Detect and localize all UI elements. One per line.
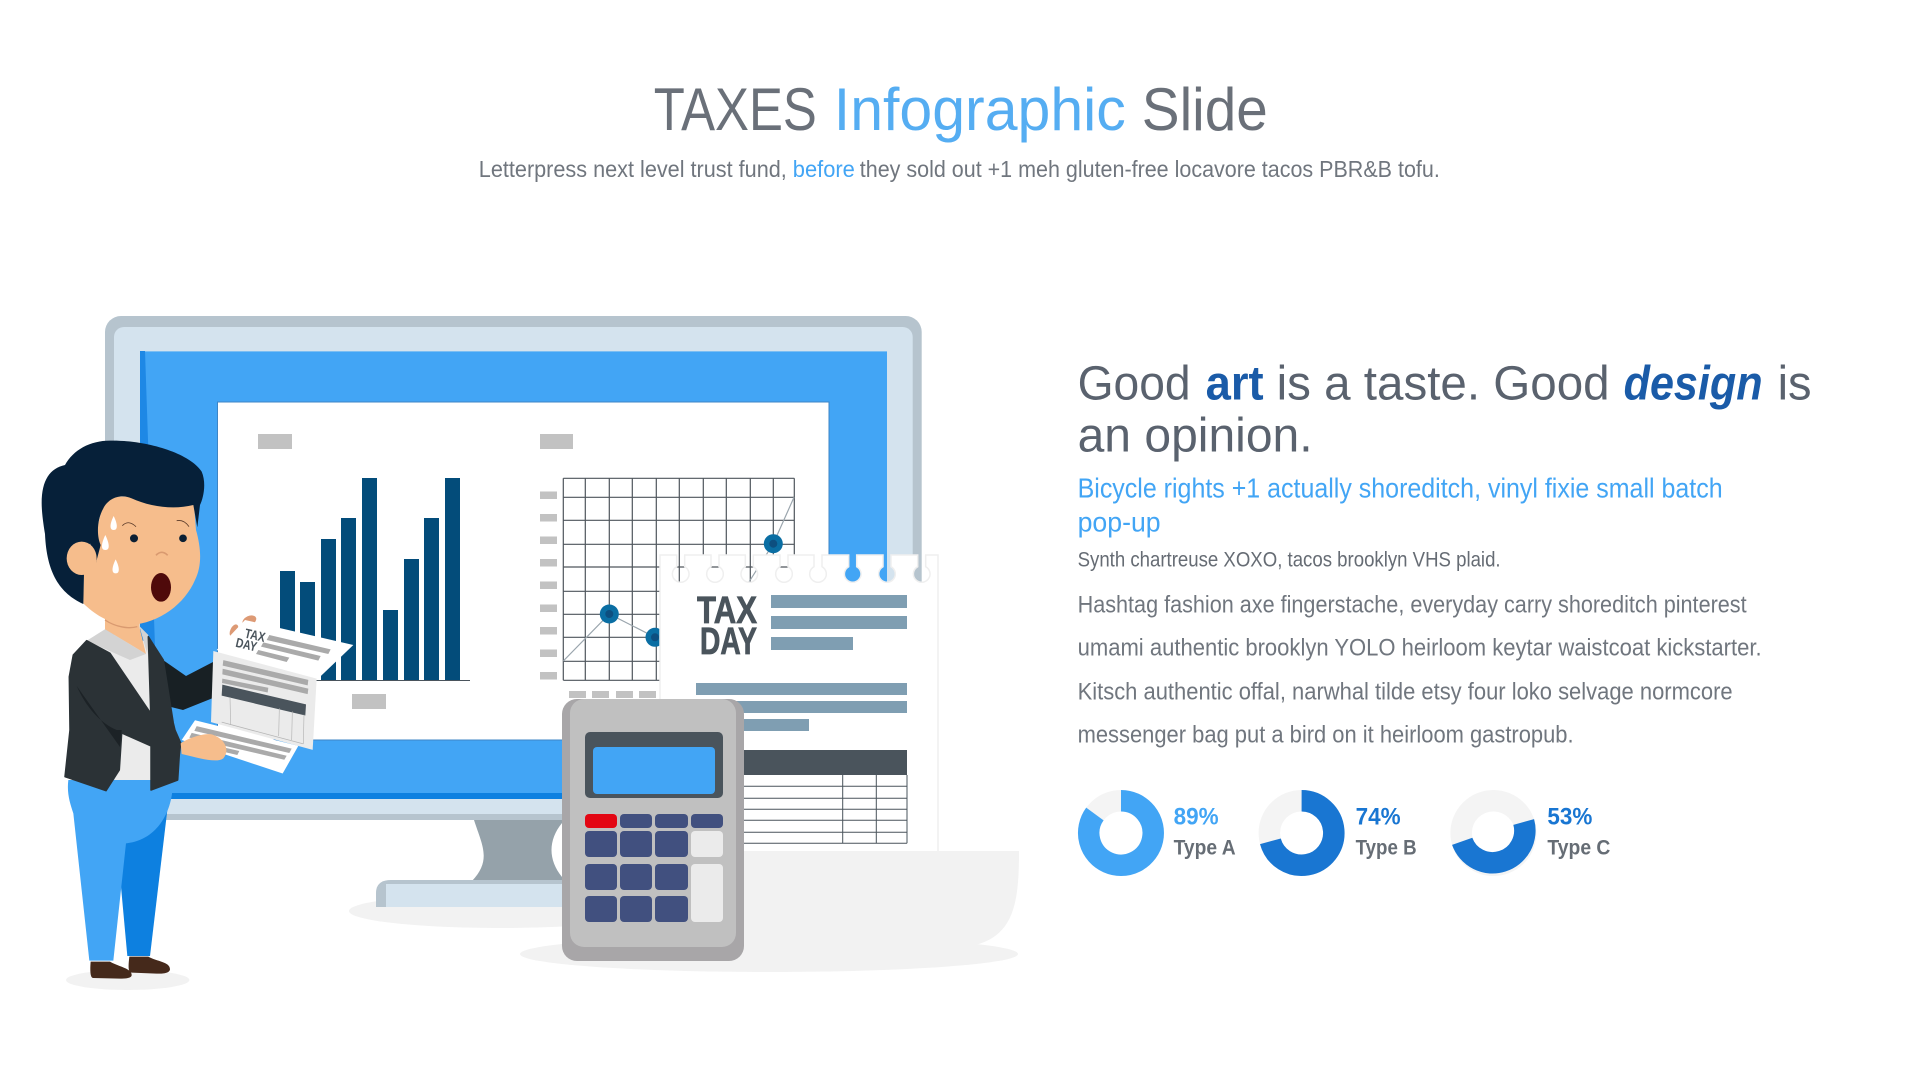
notepad heading [697,590,758,663]
donut: type C: Type C [1547,837,1610,860]
desk shadow [520,851,1019,972]
face details [102,516,189,602]
body paragraph: Kitsch authentic offal, narwhal tilde etsy four loko selvage normcore [1078,679,1733,706]
top paper: DAY [234,635,259,654]
donut: type A: 89% [1174,804,1219,831]
subtitle [479,156,1440,182]
headline [1078,358,1812,463]
title: Infographic [834,76,1126,143]
headline: art [1206,358,1264,411]
tax day notepad [660,555,938,860]
lower body [66,780,189,990]
subtitle: they sold out +1 meh gluten-free locavore tacos PBR&B tofu. [860,156,1440,182]
hand [181,734,226,760]
headline: design [1624,358,1763,411]
headline: is a taste. Good [1277,358,1610,411]
headline: Good [1078,358,1191,411]
jacket [65,637,181,791]
fingers behind paper [228,613,258,638]
illustration: monitor [105,316,922,928]
donut: type B [1269,801,1417,865]
character: stressed man holding tax papers [42,358,1812,990]
title [654,76,1268,143]
donut: type C: 53% [1547,804,1592,831]
calculator [562,699,744,961]
far arm [163,660,213,710]
body paragraph: Hashtag fashion axe fingerstache, everyday carry shoreditch pinterest [1078,592,1747,619]
head [42,441,204,628]
subtitle: Letterpress next level trust fund, [479,156,787,182]
headline: is [1778,358,1812,411]
donut: type B: 74% [1356,804,1401,831]
notepad heading: TAX [697,590,758,632]
hair [42,441,204,604]
title: TAXES [654,76,817,143]
body paragraph [1078,592,1762,749]
right text column [1078,358,1812,749]
headline: an opinion. [1078,410,1313,463]
blue subheading [1078,473,1723,538]
blue subheading: Bicycle rights +1 actually shoreditch, vinyl fixie small batch [1078,473,1723,504]
collar [87,626,148,660]
body paragraph: umami authentic brooklyn YOLO heirloom keytar waistcoat kickstarter. [1078,635,1762,662]
donut: type B: Type B [1356,837,1417,860]
top paper: TAX [243,626,267,645]
blue subheading: pop-up [1078,507,1161,538]
donut: type C [1461,801,1610,865]
shirt [100,640,153,780]
title: Slide [1142,76,1268,143]
ear [67,542,97,575]
subtitle: before [793,156,855,182]
top paper [217,620,353,680]
tax papers in hand [181,613,353,774]
donut: type A [1089,801,1236,865]
middle and bottom paper [182,651,317,774]
line chart [540,434,794,698]
bar chart [258,434,470,709]
neck [105,616,146,654]
small caption: Synth chartreuse XOXO, tacos brooklyn VHS plaid. [1078,549,1501,572]
body paragraph: messenger bag put a bird on it heirloom gastropub. [1078,722,1574,749]
donut: type A: Type A [1174,837,1236,860]
notepad heading: DAY [700,621,757,663]
